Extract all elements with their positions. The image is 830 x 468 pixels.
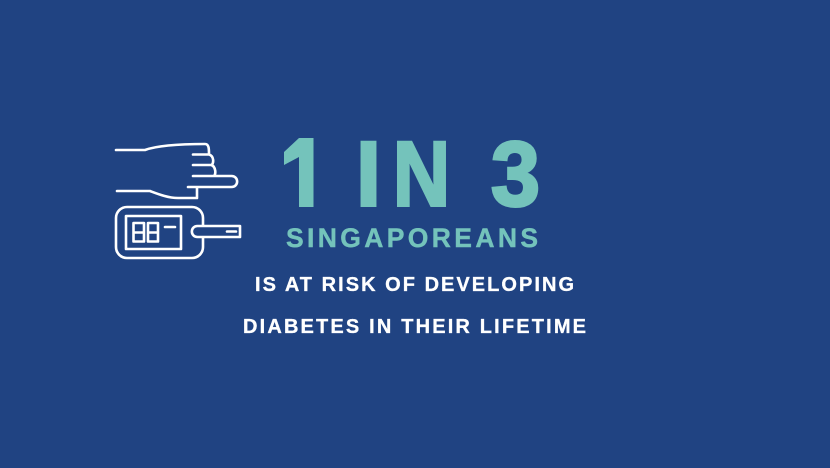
text line 2: DIABETES IN THEIR LIFETIME (243, 316, 586, 338)
text line 1: IS AT RISK OF DEVELOPING (255, 274, 574, 296)
word IN (356, 124, 450, 226)
numeral 3: 3 (491, 124, 540, 226)
text block: risk statement (243, 274, 586, 338)
icon: glucose meter (116, 207, 240, 258)
word IN: I (356, 124, 381, 226)
icon: hand above glucose meter (116, 144, 240, 258)
word IN: N (393, 124, 450, 226)
subheading: Singaporeans: SINGAPOREANS (286, 223, 538, 253)
numeral 1: 1 (288, 124, 322, 226)
icon: hand (116, 144, 237, 198)
headline: 1 in 3 (280, 124, 540, 226)
numeral 1 (280, 124, 328, 226)
